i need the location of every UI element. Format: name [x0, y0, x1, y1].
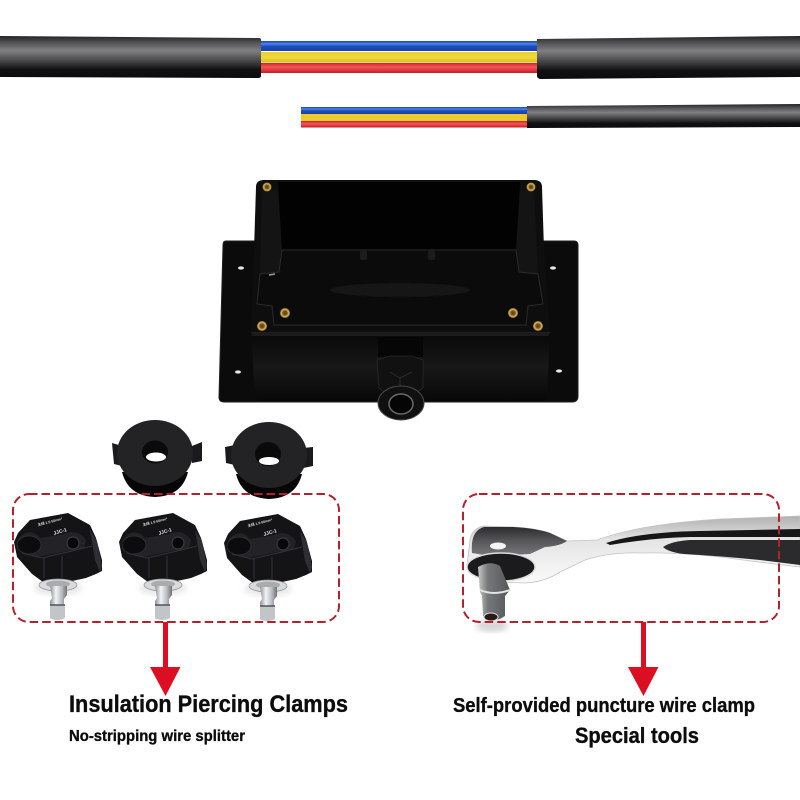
wire: blue	[301, 107, 529, 114]
socket opening	[484, 613, 498, 621]
chrome handle	[467, 516, 800, 583]
head highlight	[490, 542, 506, 550]
upper dark band	[606, 529, 800, 545]
wire: red	[301, 121, 529, 128]
clamp label: JJC-1	[158, 527, 173, 537]
clamp label: JJC-1	[263, 528, 278, 538]
floor	[257, 250, 543, 325]
brass screws	[257, 182, 543, 331]
front face	[251, 333, 550, 401]
side walls	[260, 190, 538, 274]
ratchet disc	[467, 553, 535, 581]
heading: self-provided puncture wire clamp: Self-provided puncture wire clamp	[453, 694, 755, 717]
clamp spec: 主线 1.5-50mm²	[247, 517, 274, 528]
box rim and interior	[251, 180, 550, 333]
jacket: right	[537, 36, 800, 79]
inner lip	[257, 250, 543, 325]
standoff posts	[360, 249, 435, 260]
junction box	[219, 180, 578, 420]
wire: red	[256, 63, 540, 73]
mounting flange	[219, 241, 578, 402]
wire: yellow	[256, 52, 540, 63]
back wall	[278, 182, 520, 250]
jacket: left	[0, 36, 261, 78]
subheading: no-stripping wire splitter: No-stripping wire splitter	[69, 728, 245, 745]
wall highlight	[269, 274, 275, 275]
arrow: clamps to label	[150, 622, 180, 696]
rubber grommet 2	[225, 422, 313, 499]
dashed highlight: tool	[463, 494, 779, 622]
rim line	[251, 333, 550, 335]
clamp 2	[119, 513, 207, 620]
arrow: tool to label	[628, 622, 658, 696]
cable gland	[377, 337, 424, 420]
jacket	[527, 104, 800, 128]
clamp label: JJC-1	[53, 527, 68, 537]
cable: stripped middle section	[0, 36, 800, 79]
clamp 1	[14, 513, 102, 620]
clamp spec: 主线 1.5-50mm²	[37, 516, 64, 527]
heading: insulation piercing clamps: Insulation Piercing Clamps	[69, 691, 348, 718]
clamp 3	[224, 514, 312, 621]
flange holes	[235, 266, 562, 374]
ratchet head	[472, 527, 567, 556]
cable: stripped end	[301, 104, 800, 128]
wire: yellow	[301, 114, 529, 121]
socket shadow	[476, 620, 508, 632]
wire: blue	[256, 41, 540, 51]
clamp spec: 主线 1.5-50mm²	[142, 516, 169, 527]
dashed highlight: clamps	[13, 494, 339, 622]
socket	[478, 563, 510, 620]
rubber grommet 1	[112, 420, 202, 497]
socket collar	[480, 590, 510, 593]
rubber grip	[663, 540, 800, 565]
subheading: special tools: Special tools	[575, 723, 699, 748]
floor reflection	[330, 283, 470, 297]
ratchet wrench	[467, 516, 800, 632]
